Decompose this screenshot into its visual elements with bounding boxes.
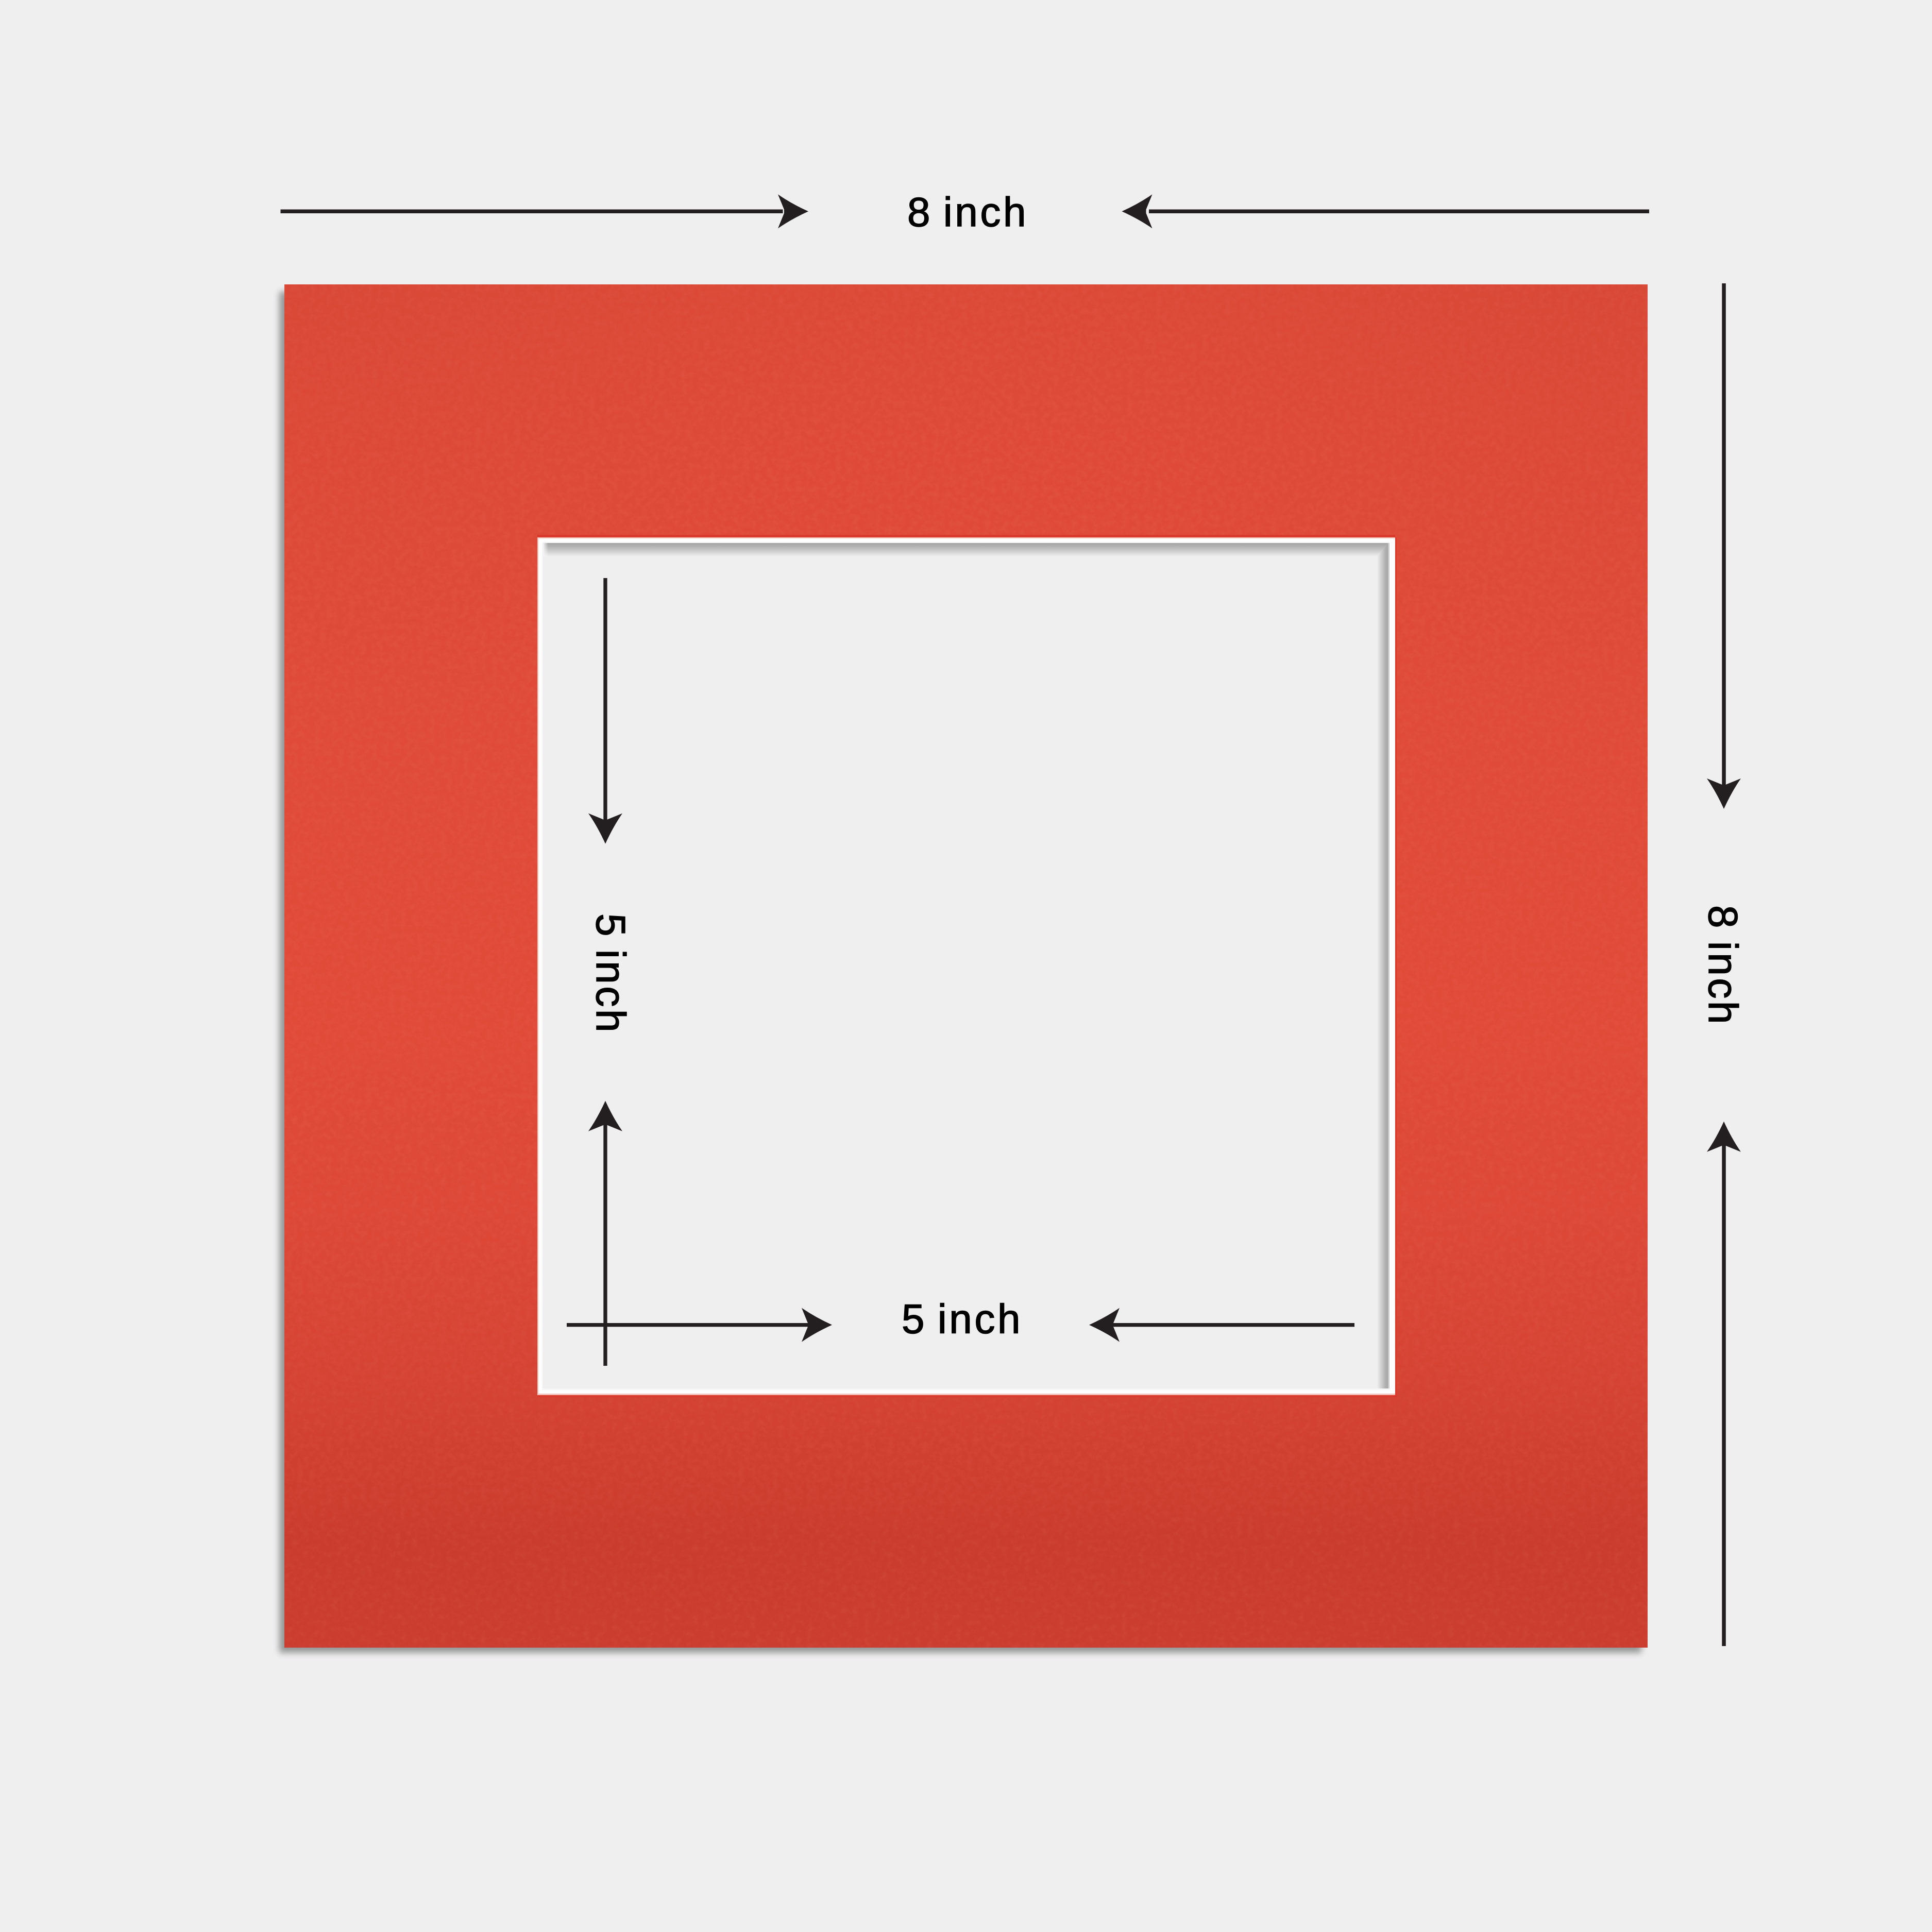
arrow: inner left lower, pointing up [588,1101,622,1366]
arrow: right side upper, pointing down [1707,283,1741,809]
window edge: cut red lines [537,535,1397,1397]
arrow: inner left upper, pointing down [588,578,622,844]
arrow: inner bottom right, pointing left [1089,1308,1354,1342]
corner tone: top right [1082,284,1648,851]
label: inner left 5 inch: 5 inch [588,913,634,1035]
label: inner bottom 5 inch: 5 inch [902,1296,1023,1342]
label: top 8 inch: 8 inch [907,189,1028,235]
window: white bevel [537,537,1395,1395]
paper grain [284,284,1648,1648]
window: bevel pink edges [537,537,1395,1395]
arrow: top left, pointing right [280,194,808,228]
mat drop shadow [279,292,1641,1653]
window: opening [542,542,1389,1390]
arrow: right side lower, pointing up [1707,1122,1741,1646]
mat board [279,284,1648,1653]
arrow: top right, pointing left [1122,194,1649,228]
window: right bevel strip [1388,543,1389,1388]
window: right inner shadow [1377,543,1388,1388]
mat surface [284,284,1648,1648]
label: right 8 inch: 8 inch [1700,905,1746,1026]
window: opening paper [543,543,1389,1388]
arrow: inner bottom left, pointing right [567,1308,832,1342]
window: top shadow left fade [543,543,548,556]
corner tone: top left [284,284,903,903]
window: top inner shadow [543,543,1388,556]
